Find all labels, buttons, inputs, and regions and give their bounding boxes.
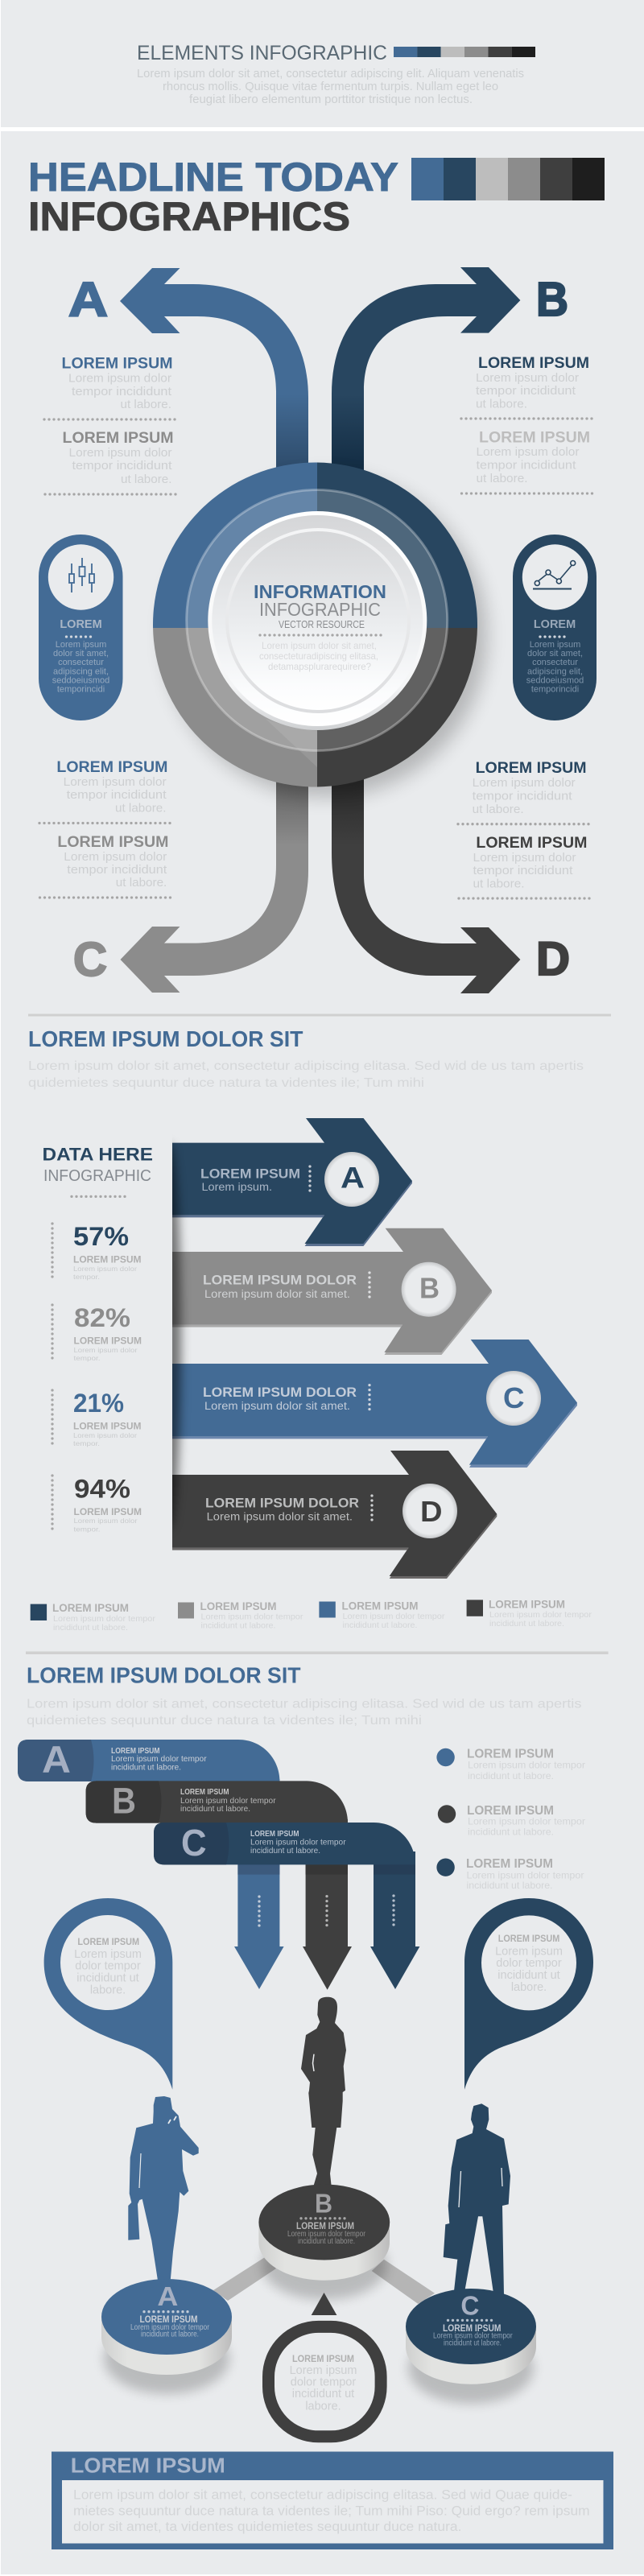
text block: D first — [458, 760, 591, 824]
banner arrow D — [172, 1451, 497, 1579]
letter B: B — [536, 273, 568, 326]
stat 21%: tempor. — [73, 1439, 100, 1447]
text block: B first — [461, 355, 594, 419]
stat 57%: tempor. — [73, 1273, 100, 1281]
section two heading — [28, 1014, 611, 1090]
right pill text: Lorem ipsum — [530, 640, 580, 650]
left pill text: dolor sit amet, — [53, 649, 109, 658]
text block: C first: ut labore. — [115, 802, 166, 815]
bar B: incididunt ut labore. — [180, 1804, 250, 1814]
section three description: quidemietes sequuntur duce natura ta videntes ile; Tum mihi — [27, 1714, 422, 1728]
bar B — [86, 1781, 348, 1823]
stat 21% — [52, 1389, 142, 1447]
connectors — [213, 2257, 435, 2304]
banner arrow B: LOREM IPSUM DOLOR — [203, 1273, 357, 1288]
section two description — [28, 1059, 584, 1090]
legend item 2: incididunt ut labore. — [201, 1621, 275, 1631]
banner arrow B: B — [419, 1271, 440, 1304]
text block: C first — [39, 759, 172, 823]
panel edge shadow — [172, 1140, 188, 1526]
right pill text — [526, 618, 584, 695]
text block: A second: ut labore. — [121, 473, 172, 486]
key item 2: incididunt ut labore. — [468, 1827, 554, 1838]
platform C: C — [460, 2291, 479, 2320]
banner arrow A — [172, 1118, 412, 1246]
pill: left — [39, 535, 122, 720]
text block: C second: ut labore. — [116, 876, 167, 890]
bar B: B — [112, 1781, 136, 1822]
platform C: Lorem ipsum dolor tempor — [433, 2332, 513, 2341]
stat 57%: LOREM IPSUM — [73, 1254, 142, 1265]
header description: rhoncus mollis. Quisque vitae fermentum turpis. Nullam eget leo — [163, 80, 498, 93]
circle label: VECTOR RESOURCE — [279, 618, 365, 630]
left pill text: Lorem ipsum — [56, 640, 106, 650]
key item 1: incididunt ut labore. — [468, 1770, 554, 1781]
footer text — [73, 2487, 590, 2534]
text block: C second: LOREM IPSUM — [57, 834, 168, 851]
key item 3 — [436, 1857, 584, 1891]
text block: B second: ut labore. — [477, 472, 528, 485]
stat 57%: Lorem ipsum dolor — [73, 1265, 137, 1273]
banner arrow A: LOREM IPSUM — [200, 1166, 300, 1182]
key item 2: Lorem ipsum dolor tempor — [468, 1815, 585, 1827]
key item 1: Lorem ipsum dolor tempor — [468, 1760, 585, 1771]
legend item 3 — [319, 1600, 445, 1630]
banner arrow D: LOREM IPSUM DOLOR — [205, 1496, 359, 1511]
text block: B first: LOREM IPSUM — [478, 355, 589, 372]
headline — [28, 155, 398, 239]
pin left: labore. — [90, 1984, 126, 1996]
stat 57%: 57% — [73, 1222, 129, 1251]
headline line one: HEADLINE TODAY — [28, 155, 398, 200]
ring glint — [266, 719, 317, 767]
left pill text: adipiscing elit, — [53, 667, 109, 676]
stat 82%: Lorem ipsum dolor — [74, 1346, 138, 1354]
silhouette: man with phone — [128, 2096, 199, 2281]
text block: D first: Lorem ipsum dolor — [473, 776, 576, 790]
ring callout: incididunt ut — [292, 2388, 354, 2401]
circle label: detamapsplurarequirere? — [268, 661, 371, 672]
left pill text: consectetur — [58, 658, 104, 667]
text block: B second: LOREM IPSUM — [479, 430, 590, 447]
footer text: dolor sit amet, ta videntes quidemietes sequuntur duce natura. — [73, 2519, 462, 2534]
right pill text: seddoeiusmod — [526, 676, 584, 686]
data panel heading: DATA HERE — [42, 1145, 153, 1164]
arrow C — [121, 777, 308, 993]
data panel heading: INFOGRAPHIC — [43, 1167, 151, 1185]
section two description: quidemietes sequuntur duce natura ta videntes ile; Tum mihi — [28, 1076, 424, 1090]
section two title: LOREM IPSUM DOLOR SIT — [28, 1026, 303, 1051]
platform A: A — [157, 2281, 178, 2311]
stat 82%: 82% — [74, 1303, 130, 1332]
text block: C first: Lorem ipsum dolor — [64, 775, 167, 789]
left pill text: seddoeiusmod — [52, 676, 109, 686]
right pill text: consectetur — [532, 658, 578, 667]
banner arrow C: C — [503, 1381, 525, 1414]
text block: B first: tempor incididunt — [476, 384, 576, 398]
pin left: Lorem ipsum — [74, 1948, 142, 1961]
platform A: incididunt ut labore. — [141, 2330, 199, 2339]
stat 94%: Lorem ipsum dolor — [74, 1517, 138, 1525]
pin left: LOREM IPSUM — [77, 1936, 139, 1947]
bar C: C — [181, 1822, 207, 1864]
platform A — [101, 2279, 232, 2394]
stat 57% — [52, 1222, 142, 1281]
platform C: incididunt ut labore. — [444, 2339, 502, 2347]
left pill text: LOREM — [60, 618, 102, 631]
text block: C second: tempor incididunt — [67, 863, 167, 877]
banner arrow B — [172, 1228, 492, 1355]
banner arrow D: Lorem ipsum dolor sit amet. — [207, 1510, 353, 1523]
text block: B second: tempor incididunt — [477, 459, 576, 472]
data panel heading — [42, 1145, 153, 1196]
banner arrow A: Lorem ipsum. — [201, 1181, 272, 1193]
text block: D second: LOREM IPSUM — [476, 835, 587, 852]
text block: D first: tempor incididunt — [473, 790, 573, 803]
circle label: INFORMATION — [254, 581, 386, 602]
legend item 3: incididunt ut labore. — [343, 1620, 417, 1630]
text block: D second: Lorem ipsum dolor — [473, 851, 576, 865]
bar A — [18, 1738, 279, 1781]
key item 2: LOREM IPSUM — [467, 1804, 554, 1818]
legend item 1 — [31, 1602, 156, 1633]
right pill text: temporincidi — [531, 685, 579, 695]
text block: C second — [40, 834, 172, 898]
pin right — [464, 1898, 593, 2090]
letter C: C — [73, 933, 107, 986]
text block: D second: ut labore. — [473, 877, 525, 890]
pin left: incididunt ut — [76, 1972, 139, 1985]
banner arrow D: D — [420, 1495, 443, 1528]
key item 2 — [438, 1804, 585, 1838]
legend item 1: Lorem ipsum dolor tempor — [53, 1614, 156, 1624]
legend item 3: LOREM IPSUM — [341, 1600, 419, 1612]
section three title: LOREM IPSUM DOLOR SIT — [27, 1663, 301, 1688]
header description: Lorem ipsum dolor sit amet, consectetur adipiscing elit. Aliquam venenatis — [137, 67, 524, 80]
pin left — [44, 1898, 172, 2090]
circle label: Lorem ipsum dolor sit amet, — [262, 640, 377, 651]
banner arrow C: Lorem ipsum dolor sit amet. — [204, 1400, 350, 1412]
text block: A second — [45, 430, 178, 494]
stat 21%: LOREM IPSUM — [73, 1421, 142, 1432]
legend item 4: incididunt ut labore. — [489, 1619, 564, 1629]
platform A: LOREM IPSUM — [140, 2314, 198, 2325]
text block: A second: tempor incididunt — [72, 459, 172, 473]
legend item 1: LOREM IPSUM — [52, 1602, 129, 1614]
text block: A first: tempor incididunt — [72, 385, 172, 398]
legend item 4: LOREM IPSUM — [489, 1599, 565, 1611]
bar C — [154, 1822, 415, 1864]
footer box — [52, 2452, 613, 2549]
platform C — [406, 2289, 536, 2404]
circle label: consecteturadipiscing elitasa, — [259, 650, 378, 662]
silhouette: woman — [301, 1997, 346, 2186]
stat 82% — [52, 1303, 142, 1362]
legend item 2 — [178, 1600, 303, 1631]
header description: feugiat libero elementum porttitor tristique non lectus. — [189, 93, 473, 106]
text block: D second: tempor incididunt — [473, 864, 573, 877]
section two description: Lorem ipsum dolor sit amet, consectetur adipiscing elitasa. Sed wid de us tam apertis — [28, 1059, 584, 1073]
section three description: Lorem ipsum dolor sit amet, consectetur adipiscing elitasa. Sed wid de us tam apertis — [27, 1697, 581, 1711]
arrow B — [332, 267, 520, 475]
arrow A — [120, 268, 308, 475]
icon: line chart — [533, 560, 576, 589]
stat 82%: tempor. — [74, 1354, 100, 1362]
translucent ring — [187, 489, 448, 750]
headline colour swatches — [411, 158, 605, 200]
silhouette: man with briefcase — [444, 2103, 510, 2295]
circle drop shadow — [165, 475, 487, 797]
right pill text: adipiscing elit, — [527, 667, 583, 676]
footer text: Lorem ipsum dolor sit amet, consectetur adipiscing elitasa. Sed wid Quae quide- — [73, 2487, 572, 2502]
pin right: labore. — [511, 1981, 547, 1994]
text block: B first: Lorem ipsum dolor — [476, 371, 579, 385]
bar A: A — [42, 1738, 71, 1781]
text block: D second — [459, 835, 592, 898]
text block: B second: Lorem ipsum dolor — [477, 445, 580, 459]
stat 94% — [52, 1474, 142, 1534]
text block: A first — [44, 356, 177, 419]
banner arrow B: Lorem ipsum dolor sit amet. — [204, 1288, 350, 1300]
stat 94%: tempor. — [74, 1525, 100, 1534]
central circle — [153, 462, 487, 797]
bar C: incididunt ut labore. — [250, 1846, 320, 1856]
letter D: D — [536, 933, 570, 985]
circle label: INFOGRAPHIC — [259, 599, 381, 620]
text block: A second: LOREM IPSUM — [63, 430, 174, 447]
letter A: A — [68, 272, 108, 327]
pin right: LOREM IPSUM — [498, 1933, 559, 1944]
platform C: LOREM IPSUM — [443, 2322, 501, 2334]
right pill text: dolor sit amet, — [527, 649, 583, 658]
legend item 3: Lorem ipsum dolor tempor — [343, 1612, 445, 1621]
stat 21%: Lorem ipsum dolor — [73, 1431, 137, 1439]
stat 82%: LOREM IPSUM — [74, 1335, 142, 1347]
text block: B second — [462, 430, 594, 493]
text block: A first: ut labore. — [121, 398, 171, 411]
text block: C second: Lorem ipsum dolor — [64, 850, 167, 864]
banner arrow A: A — [341, 1162, 365, 1195]
bar A: Lorem ipsum dolor tempor — [111, 1754, 207, 1764]
text block: A second: Lorem ipsum dolor — [69, 446, 172, 460]
text block: A first: Lorem ipsum dolor — [68, 372, 171, 385]
banner arrow C: LOREM IPSUM DOLOR — [203, 1385, 357, 1400]
legend item 4: Lorem ipsum dolor tempor — [489, 1610, 592, 1620]
ring callout: Lorem ipsum — [290, 2364, 357, 2377]
platform B — [258, 2185, 390, 2300]
white inner disc — [208, 511, 427, 730]
text block: A first: LOREM IPSUM — [61, 356, 172, 372]
pin right: incididunt ut — [497, 1969, 560, 1982]
bar B: Lorem ipsum dolor tempor — [180, 1796, 276, 1806]
banner arrow C — [172, 1340, 577, 1468]
ring callout: dolor tempor — [291, 2376, 356, 2389]
text block: C first: tempor incididunt — [67, 788, 167, 802]
platform A: Lorem ipsum dolor tempor — [130, 2323, 210, 2332]
ring callout: labore. — [305, 2400, 341, 2413]
footer title: LOREM IPSUM — [71, 2454, 225, 2478]
section three description — [27, 1697, 581, 1728]
key item 3: LOREM IPSUM — [466, 1857, 553, 1871]
bar C: Lorem ipsum dolor tempor — [250, 1838, 346, 1847]
key item 1 — [436, 1747, 585, 1781]
text block: D first: ut labore. — [473, 803, 524, 816]
right pill text: LOREM — [534, 618, 576, 631]
circle label — [254, 581, 386, 672]
arrow D — [332, 777, 520, 993]
key item 1: LOREM IPSUM — [467, 1747, 554, 1761]
text block: B first: ut labore. — [476, 398, 527, 411]
text block: D first: LOREM IPSUM — [476, 760, 587, 777]
platform B: LOREM IPSUM — [296, 2220, 354, 2231]
footer text: mietes sequuntur duce natura ta videntes ile; Tum mihi Piso: Quid ergo? rem ipsum — [73, 2503, 590, 2518]
legend item 2: LOREM IPSUM — [200, 1600, 277, 1612]
down arrow C — [370, 1852, 419, 1989]
legend item 4 — [467, 1599, 592, 1629]
four colour disc — [153, 462, 477, 787]
header colour swatches — [394, 47, 535, 57]
bar B: LOREM IPSUM — [180, 1787, 229, 1797]
pin right: Lorem ipsum — [495, 1945, 563, 1958]
left pill text — [52, 618, 109, 695]
legend item 1: incididunt ut labore. — [53, 1623, 128, 1633]
bar A: LOREM IPSUM — [111, 1746, 160, 1756]
platform B: incididunt ut labore. — [298, 2237, 355, 2246]
triangle pointer — [312, 2293, 336, 2315]
left pill text: temporincidi — [57, 685, 105, 695]
stat 94%: LOREM IPSUM — [74, 1506, 142, 1517]
down arrow A — [234, 1779, 284, 1989]
bar C: LOREM IPSUM — [250, 1829, 299, 1839]
text block: C first: LOREM IPSUM — [56, 759, 167, 776]
key item 3: incididunt ut labore. — [467, 1880, 552, 1891]
pin left: dolor tempor — [75, 1960, 141, 1973]
icon: candlestick chart — [69, 558, 94, 592]
pill: right — [513, 535, 597, 720]
header: elements infographic — [137, 42, 535, 106]
bar A: incididunt ut labore. — [111, 1763, 181, 1773]
header description — [137, 67, 524, 106]
section three heading — [26, 1652, 609, 1728]
platform B: B — [315, 2188, 332, 2219]
legend item 2: Lorem ipsum dolor tempor — [201, 1612, 303, 1621]
stat 21%: 21% — [73, 1389, 124, 1418]
down arrow B — [303, 1819, 352, 1990]
key item 3: Lorem ipsum dolor tempor — [467, 1869, 584, 1880]
ring callout: LOREM IPSUM — [292, 2353, 354, 2364]
platform B: Lorem ipsum dolor tempor — [287, 2230, 366, 2239]
stat 94%: 94% — [74, 1474, 130, 1503]
header title: ELEMENTS INFOGRAPHIC — [137, 42, 387, 64]
pin right: dolor tempor — [496, 1957, 562, 1970]
headline line two: INFOGRAPHICS — [28, 194, 350, 239]
ring callout — [269, 2326, 381, 2437]
